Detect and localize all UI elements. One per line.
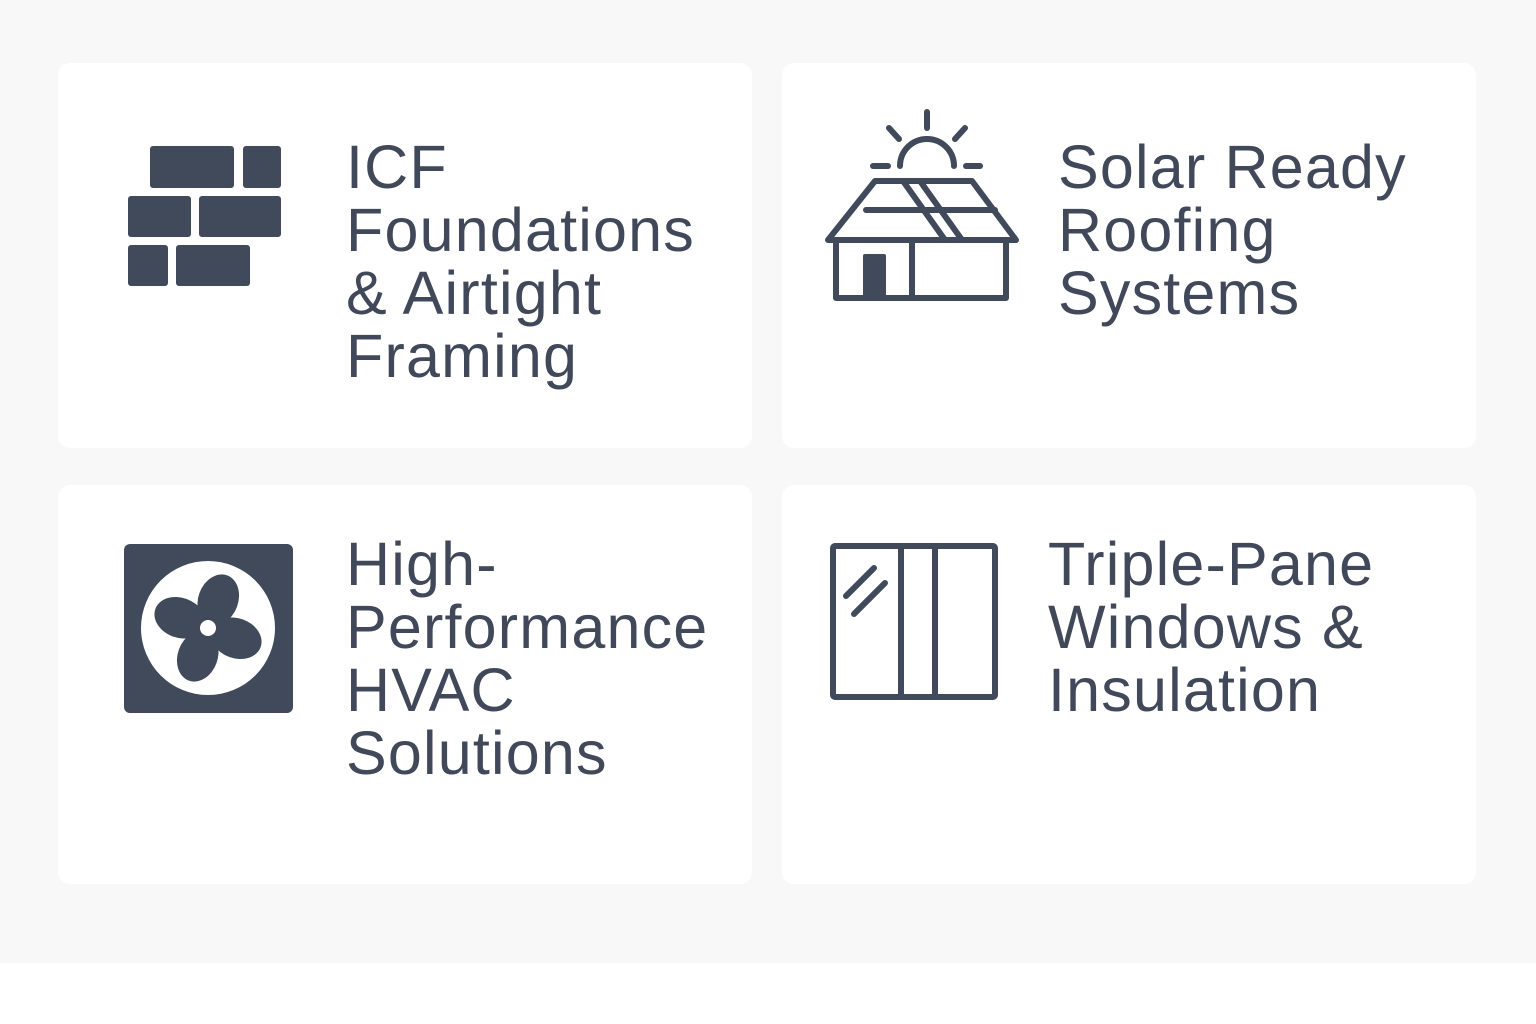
heading: HVAC: Solutions	[346, 719, 608, 787]
panel: windows	[782, 485, 1476, 884]
heading: solar: Systems	[1058, 259, 1300, 327]
panel: HVAC	[58, 485, 752, 884]
heading: HVAC	[346, 530, 708, 787]
heading: windows: Windows &	[1048, 593, 1364, 661]
heading: solar: Solar Ready	[1058, 133, 1407, 201]
icon: bricks	[128, 146, 281, 286]
heading: ICF: & Airtight	[346, 259, 602, 327]
panel: solar roofing	[782, 63, 1476, 448]
heading: HVAC: Performance	[346, 593, 708, 661]
heading: HVAC: HVAC	[346, 656, 516, 724]
icon: solar house	[828, 112, 1016, 298]
heading: ICF: ICF	[346, 133, 448, 201]
heading: ICF: Framing	[346, 322, 578, 390]
icon: window	[833, 546, 995, 697]
panel: ICF foundations	[58, 63, 752, 448]
heading: windows: Insulation	[1048, 656, 1321, 724]
heading: windows	[1048, 530, 1374, 724]
heading: windows: Triple-Pane	[1048, 530, 1374, 598]
icon: fan	[124, 544, 293, 713]
heading: solar: Roofing	[1058, 196, 1277, 264]
heading: HVAC: High-	[346, 530, 498, 598]
heading: ICF: Foundations	[346, 196, 695, 264]
heading: ICF	[346, 133, 695, 390]
heading: solar	[1058, 133, 1407, 327]
